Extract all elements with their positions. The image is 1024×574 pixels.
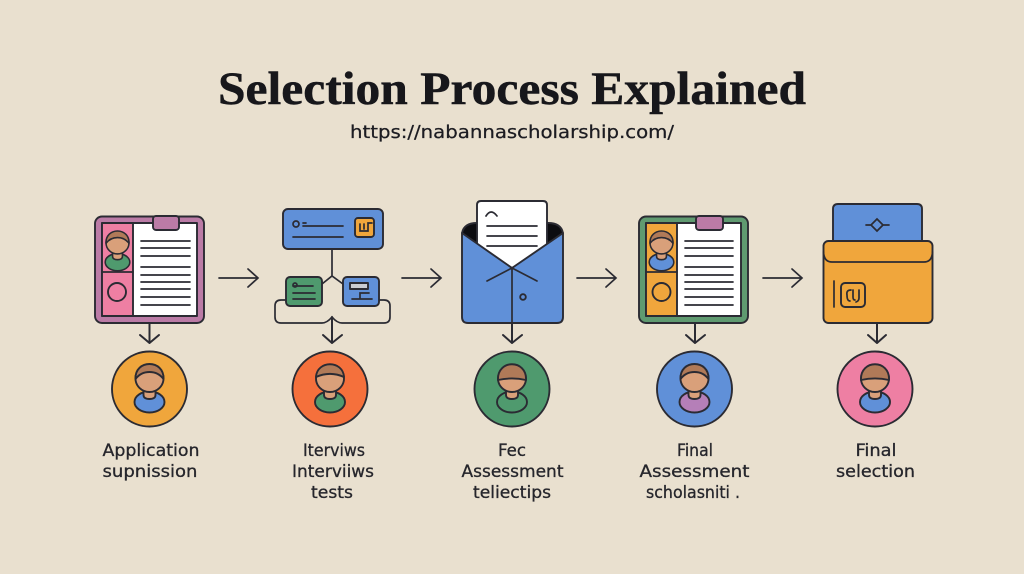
avatar: blue circle (657, 352, 732, 426)
arrow: card to avatar (686, 323, 705, 343)
arrow: step 3 to 4 (577, 269, 616, 287)
avatar: red-orange circle (292, 352, 368, 426)
label: step 3: teliectips (473, 483, 551, 502)
label: step 5: Final (856, 441, 896, 460)
label: step 2: Iterviws (303, 441, 365, 460)
label: step 4: scholasniti . (646, 483, 740, 502)
label: step 3: Fec (498, 441, 526, 460)
arrow: step 1 to 2 (219, 269, 258, 287)
avatar: orange circle (112, 352, 187, 426)
label: step 3: Assessment (462, 462, 564, 481)
arrow: card to avatar (140, 323, 159, 343)
label: step 2: tests (311, 483, 353, 502)
label: step 2: Interviiws (292, 462, 374, 481)
label: step 5: selection (836, 462, 915, 481)
arrow: step 4 to 5 (763, 269, 802, 287)
arrow: chart to avatar (323, 317, 342, 343)
icon: envelope with letter (462, 201, 563, 323)
icon: folder with card (824, 204, 932, 323)
label: step 4: Assessment (640, 462, 750, 481)
icon: interview org chart (275, 209, 390, 323)
label: step 1: supnission (102, 462, 198, 481)
panel: step 3 assessment (462, 201, 564, 502)
panel: step 2 interviews (275, 209, 390, 502)
subtitle url: https://nabannascholarship.com/ (350, 122, 675, 143)
avatar: pink circle (838, 352, 912, 426)
panel: step 1 application (95, 216, 204, 481)
arrow: step 2 to 3 (402, 269, 441, 287)
arrow: envelope to avatar (503, 323, 522, 343)
label: step 4: Final (677, 441, 713, 460)
title: Selection Process Explained (218, 63, 806, 115)
label: step 1: Application (102, 441, 200, 460)
avatar: green circle (474, 352, 550, 426)
arrow: folder to avatar (868, 323, 886, 343)
icon: application clipboard (95, 216, 204, 323)
panel: step 5 selection (824, 204, 932, 481)
icon: assessment clipboard (639, 216, 748, 323)
panel: step 4 final assessment (639, 216, 750, 502)
